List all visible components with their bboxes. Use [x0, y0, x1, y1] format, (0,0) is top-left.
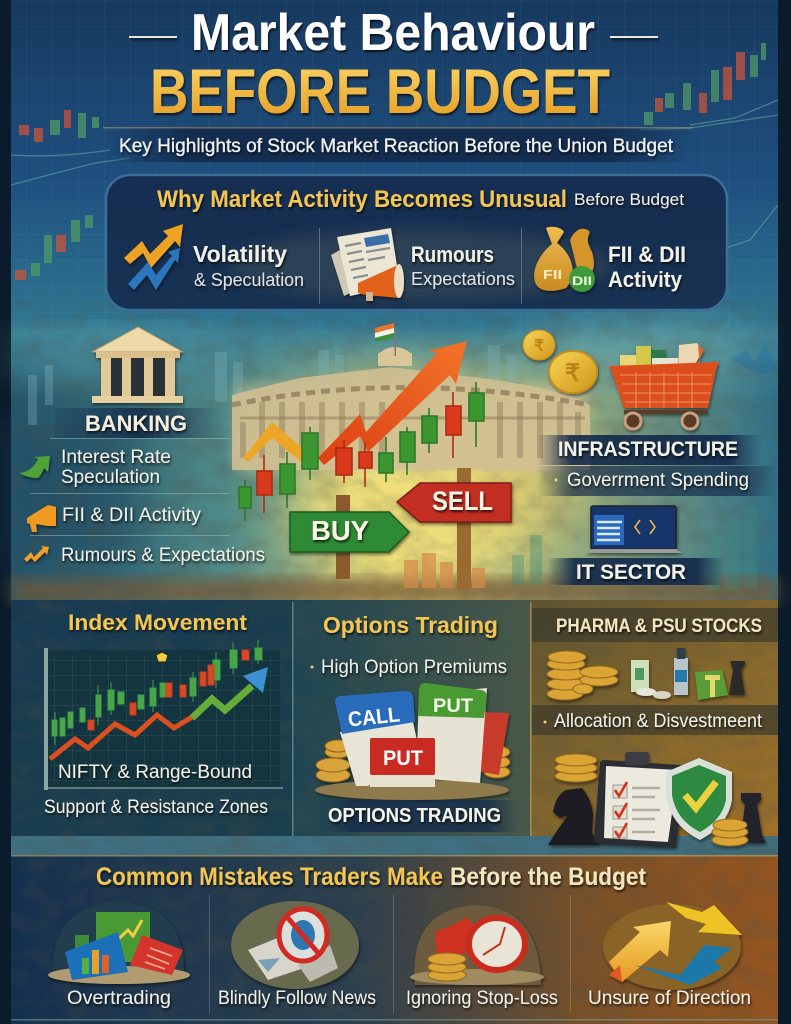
heading: common mistakes: Before the Budget	[450, 863, 647, 891]
illustration: call and put cards	[315, 683, 510, 800]
title	[129, 4, 658, 127]
NIFTY label: NIFTY & Range-Bound	[58, 762, 252, 783]
flag	[375, 323, 412, 366]
banking list: FII & DII Activity	[62, 505, 202, 526]
icon: overtrading charts	[48, 902, 190, 984]
heading: common mistakes: Common Mistakes Traders Make	[96, 863, 443, 891]
FII and DII label: FII & DII	[608, 242, 686, 267]
mistake: overtrading	[48, 902, 190, 1009]
background orange bars	[404, 553, 485, 588]
candlesticks	[239, 382, 484, 521]
illustration: call and put cards: CALL	[347, 703, 401, 732]
infrastructure heading	[537, 435, 762, 465]
line and candle chart	[44, 640, 283, 790]
banking list: Interest Rate	[61, 447, 171, 468]
FII and DII label	[608, 242, 686, 292]
subtitle banner: Key Highlights of Stock Market Reaction Before the Union Budget	[119, 136, 674, 157]
sign: sell: SELL	[432, 486, 493, 516]
mistake: unsure of direction	[588, 902, 751, 1009]
yellow chevron	[243, 422, 304, 464]
panel: options trading	[310, 612, 518, 832]
central trend arrow and candlesticks	[239, 341, 484, 521]
banking list: Rumours & Expectations	[61, 545, 265, 566]
banking list	[19, 438, 265, 566]
icon: shopping cart	[609, 343, 719, 429]
parliament building	[232, 323, 590, 470]
icon: FII and DII money bags: FII	[543, 267, 562, 282]
panel: index movement	[44, 610, 283, 818]
heading: pharma and PSU stocks: PHARMA & PSU STOCKS	[556, 616, 762, 637]
mistake: ignoring stop-loss	[406, 905, 558, 1009]
icon: gold coins: ₹	[534, 338, 544, 355]
support and resistance label: Support & Resistance Zones	[44, 797, 268, 818]
heading: index movement: Index Movement	[68, 610, 248, 635]
banking list: Speculation	[61, 467, 160, 488]
allocation and disvestment label	[532, 705, 778, 735]
icon: FII and DII money bags: DII	[572, 274, 592, 288]
icon: gold coins: ₹	[565, 360, 580, 387]
label: Overtrading	[67, 988, 171, 1009]
banking heading: BANKING	[85, 411, 187, 436]
panel heading: Why Market Activity Becomes Unusual	[157, 186, 567, 213]
icon: gold coins	[523, 330, 597, 393]
icon: volatility arrows	[124, 224, 183, 290]
IT sector heading: IT SECTOR	[576, 561, 686, 584]
icon group: coins and medicine	[547, 648, 745, 700]
orange rising arrow	[318, 341, 467, 465]
panel: why market activity becomes unusual	[106, 175, 727, 310]
high option premiums: High Option Premiums	[321, 657, 507, 678]
icon: FII and DII money bags	[534, 227, 595, 292]
FII and DII label: Activity	[608, 267, 683, 292]
icon: crossed out news	[231, 901, 359, 989]
illustration: call and put cards: PUT	[433, 696, 473, 717]
allocation and disvestment label: Allocation & Disvestmeent	[554, 711, 763, 732]
volatility label: Volatility	[193, 241, 287, 267]
volatility label: & Speculation	[194, 270, 304, 290]
panel heading: Before Budget	[574, 190, 684, 209]
icon: stop sign and coins	[410, 905, 544, 985]
icon: conflicting arrows	[603, 902, 742, 990]
panel: pharma and PSU stocks	[532, 608, 778, 848]
rumours label: Expectations	[411, 269, 515, 289]
illustration: call and put cards: PUT	[383, 747, 423, 770]
subtitle banner	[103, 127, 693, 162]
volatility label	[193, 241, 304, 290]
icon: bank building	[92, 327, 183, 403]
government spending label: Goverrment Spending	[567, 470, 749, 491]
heading: options trading: Options Trading	[323, 612, 498, 638]
options trading label	[322, 800, 518, 832]
mistake: blindly follow news	[218, 901, 376, 1009]
icon: zigzag	[24, 546, 49, 562]
infrastructure heading: INFRASTRUCTURE	[558, 438, 738, 461]
background city skyline	[28, 345, 778, 590]
label: Blindly Follow News	[218, 988, 376, 1009]
illustration: clipboard shield and chess pieces	[548, 752, 766, 848]
icon: megaphone	[27, 505, 56, 532]
government spending label	[537, 466, 777, 496]
heading: pharma and PSU stocks	[532, 608, 778, 642]
label: Ignoring Stop-Loss	[406, 988, 558, 1009]
title: BEFORE BUDGET	[150, 57, 610, 127]
icon: newspaper and megaphone	[331, 228, 404, 301]
rumours label: Rumours	[411, 242, 494, 267]
icon: laptop	[585, 506, 682, 553]
sign: buy: BUY	[311, 515, 369, 546]
title: Market Behaviour	[191, 4, 595, 62]
options trading label: OPTIONS TRADING	[328, 805, 501, 827]
IT sector heading	[548, 558, 724, 585]
rumours label	[411, 242, 515, 289]
sign: sell	[397, 468, 511, 590]
label: Unsure of Direction	[588, 988, 751, 1009]
icon: green arrow	[19, 456, 50, 478]
background candlestick charts	[11, 43, 778, 280]
banking heading	[55, 408, 225, 438]
sign: buy	[290, 495, 409, 579]
